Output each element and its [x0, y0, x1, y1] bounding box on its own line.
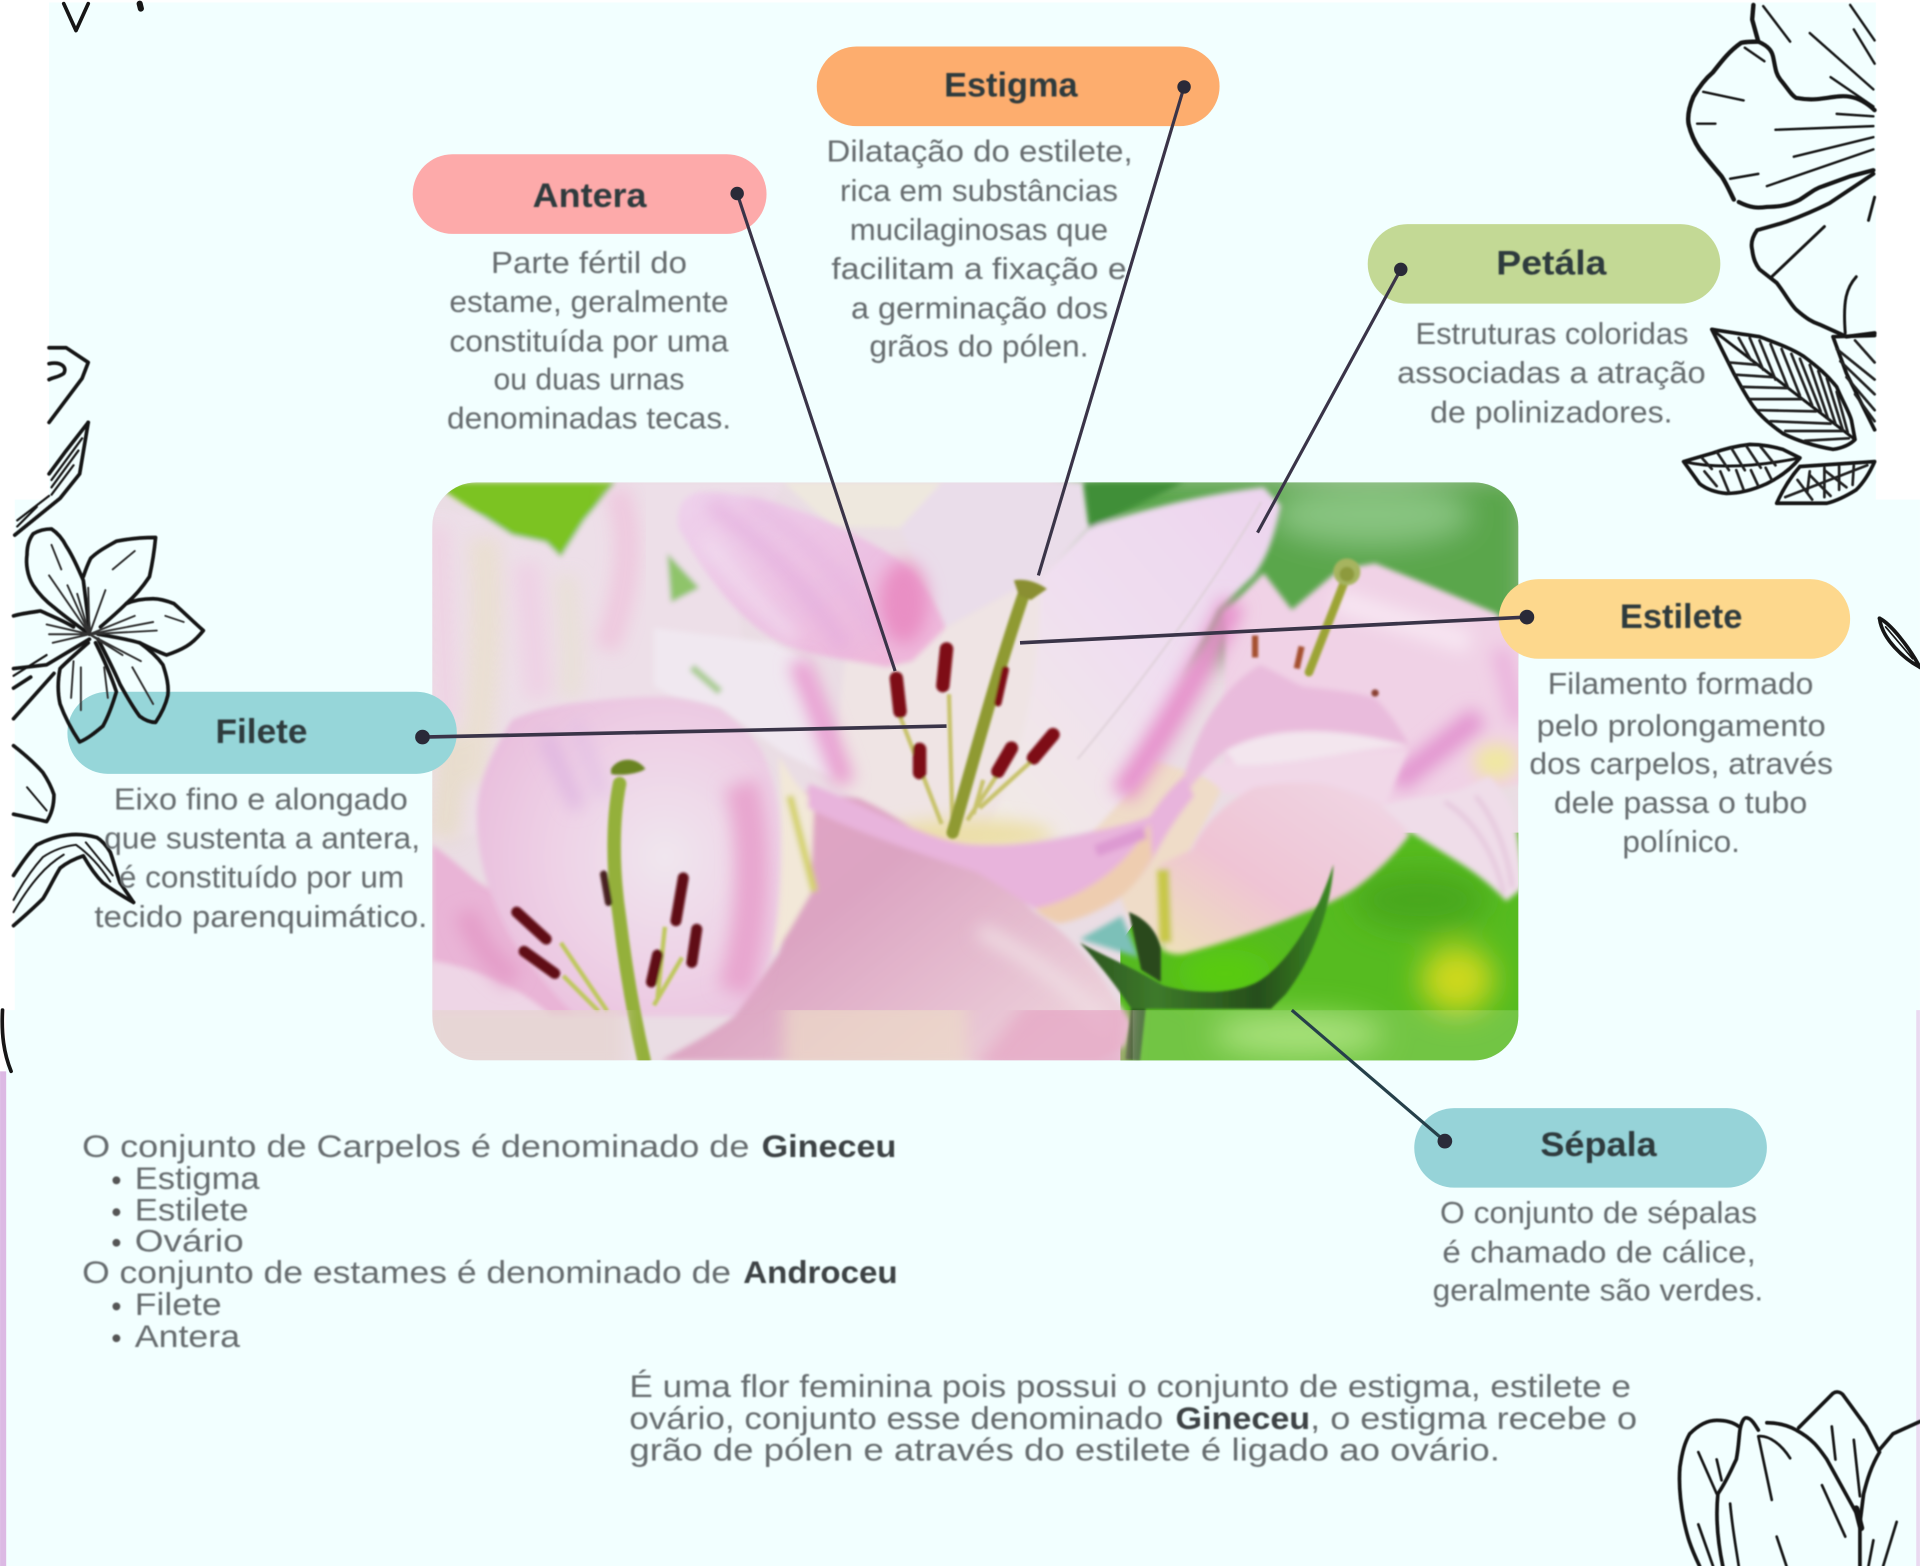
text: Estilete description: polínico. [1622, 825, 1740, 859]
line art: top left fragments [64, 4, 141, 31]
text: flower explanation paragraph: , o estigma recebe o [1310, 1400, 1637, 1436]
text: Filete description [94, 782, 427, 934]
text: Gineceu and Androceu lists: Estilete [135, 1192, 249, 1228]
text: Filete description: é constituído por um [119, 861, 404, 895]
connector lines and dots [415, 80, 1534, 1148]
text: Antera description: Parte fértil do [491, 246, 687, 280]
text: Estigma description: rica em substâncias [840, 174, 1118, 208]
pill: Estilete: Estilete [1620, 598, 1742, 636]
pill: Estigma [817, 47, 1220, 126]
text: Estigma description: Dilatação do estilete, [827, 135, 1133, 169]
pill: Petala: Petála [1496, 244, 1607, 282]
main flower style [953, 588, 1026, 833]
fold of yellow [775, 768, 817, 946]
line art: left lily flower [14, 529, 203, 926]
text: Petala description: associadas a atração [1397, 356, 1706, 390]
pill: Petala [1368, 224, 1720, 304]
text: flower explanation paragraph: Gineceu [1175, 1400, 1310, 1436]
pill: Antera: Antera [533, 177, 648, 215]
text: Petala description: Estruturas coloridas [1415, 317, 1689, 351]
upper right petal [1040, 484, 1284, 822]
text: Antera description: constituída por uma [449, 324, 730, 358]
lower strip of the photo [432, 1010, 1518, 1060]
big leaf [1712, 329, 1855, 449]
text: Antera description: estame, geralmente [449, 285, 729, 319]
text: Estigma description: grãos do pólen. [869, 329, 1089, 363]
text: Sepala description: O conjunto de sépalas [1440, 1196, 1757, 1230]
line art: bottom left fragment [2, 1010, 11, 1071]
pale lower left centre [654, 628, 845, 784]
front lower mauve petal [661, 791, 1131, 1060]
text: Antera description [447, 246, 731, 436]
text: Sepala description: geralmente são verdes. [1433, 1273, 1763, 1307]
main lower band [808, 776, 1194, 923]
pill: Filete [67, 692, 457, 774]
pill: Filete: Filete [216, 713, 307, 751]
main flower cream centre [949, 633, 950, 634]
text: Estilete description [1529, 667, 1833, 859]
text: Estigma description: mucilaginosas que [850, 213, 1108, 247]
text: Estilete description: Filamento formado [1548, 667, 1813, 701]
pill: Sepala: Sépala [1540, 1126, 1658, 1164]
leaf behind [1833, 335, 1875, 430]
line art: top right flower and leaves [1684, 5, 1875, 503]
text: Petala description: de polinizadores. [1430, 395, 1673, 429]
right flower stamen [1309, 575, 1347, 672]
front lily left low petal [432, 845, 606, 1016]
text: Antera description: ou duas urnas [494, 362, 685, 396]
right lily back petals [1224, 563, 1524, 808]
text: Gineceu and Androceu lists [82, 1128, 898, 1354]
text: Filete description: tecido parenquimático. [94, 900, 427, 934]
text: Gineceu and Androceu lists: Ovário [135, 1222, 244, 1258]
line art: left leaves [15, 348, 88, 535]
text: Estigma description [827, 135, 1133, 363]
text: Gineceu and Androceu lists: Filete [135, 1286, 222, 1322]
text: Estilete description: pelo prolongamento [1537, 709, 1826, 743]
text: Estigma description: a germinação dos [851, 291, 1108, 325]
front lily main petal [477, 697, 780, 1016]
top left green [432, 482, 616, 557]
text: flower explanation paragraph: É uma flor feminina pois possui o conjunto de estigma, estilete e [629, 1368, 1631, 1404]
text: Antera description: denominadas tecas. [447, 402, 731, 436]
photo: pink lily flowers [422, 471, 1531, 1077]
text: Filete description: Eixo fino e alongado [114, 782, 408, 816]
pill: Estilete [1499, 579, 1850, 659]
side bud petal [1159, 783, 1409, 954]
dark stem and sepal [1133, 1004, 1139, 1060]
front flower filaments and style [561, 927, 682, 1011]
text: Filete description: que sustenta a antera, [104, 822, 420, 856]
text: Estilete description: dos carpelos, através [1529, 747, 1833, 781]
text: Gineceu and Androceu lists: Estigma [135, 1160, 260, 1196]
text: Gineceu and Androceu lists: Antera [135, 1318, 240, 1354]
text: flower explanation paragraph: ovário, conjunto esse denominado [629, 1400, 1163, 1436]
main flower filaments [900, 694, 1031, 828]
text: Petala description [1397, 317, 1706, 429]
back lily left [464, 482, 700, 604]
upper left petal [678, 492, 945, 667]
text: Gineceu and Androceu lists: Gineceu [762, 1128, 896, 1164]
text: Sepala description [1433, 1196, 1763, 1307]
main flower anthers [896, 649, 1053, 773]
text: Gineceu and Androceu lists: O conjunto de estames é denominado de [82, 1254, 731, 1290]
curled petal group [1207, 751, 1407, 797]
text: flower explanation paragraph: grão de pólen e através do estilete é ligado ao ovário. [629, 1432, 1500, 1468]
text: flower explanation paragraph [629, 1368, 1637, 1468]
line art: right edge leaf fragment [1880, 618, 1920, 667]
petal backing between main and side flower [1093, 759, 1224, 950]
text: Estigma description: facilitam a fixação e [831, 252, 1127, 286]
dark green wedge [1084, 482, 1184, 528]
text: Sepala description: é chamado de cálice, [1442, 1235, 1756, 1269]
pill: Estigma: Estigma [944, 67, 1078, 105]
teal background patch [1080, 916, 1139, 957]
pill: Sepala [1414, 1108, 1767, 1188]
line art: bottom right tulip [1679, 1392, 1920, 1566]
small leaf right [1777, 462, 1875, 503]
text: Gineceu and Androceu lists: Androceu [743, 1254, 898, 1290]
text: Gineceu and Androceu lists: O conjunto de Carpelos é denominado de [82, 1128, 749, 1164]
small leaf left [1684, 444, 1800, 493]
pill: Antera [413, 154, 767, 234]
text: Estilete description: dele passa o tubo [1554, 786, 1807, 820]
